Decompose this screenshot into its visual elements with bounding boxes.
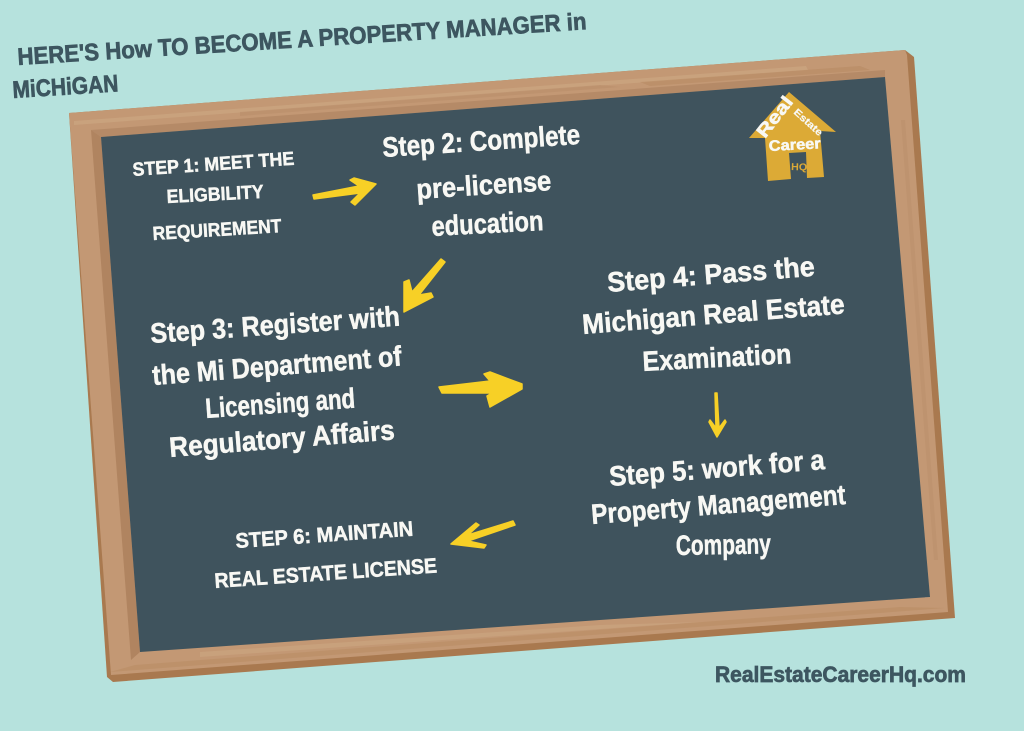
step 4 text bbox=[581, 251, 846, 377]
step 6 text: REAL ESTATE LICENSE bbox=[214, 554, 438, 593]
logo: Real Estate Career HQ house: HQ bbox=[791, 162, 808, 174]
step 1 text: REQUIREMENT bbox=[152, 216, 282, 245]
step 3 text: Regulatory Affairs bbox=[168, 414, 396, 463]
step 2 text bbox=[381, 119, 581, 242]
step 1 text bbox=[132, 149, 295, 245]
step 6 text bbox=[214, 518, 438, 593]
step 3 text: Step 3: Register with bbox=[149, 301, 401, 349]
arrow: step 4 to step 5 bbox=[709, 393, 726, 437]
step 4 text: Examination bbox=[642, 338, 792, 377]
arrow: step 5 to step 6 bbox=[451, 521, 515, 548]
arrow: step 1 to step 2 bbox=[313, 178, 376, 205]
step 4 text: Step 4: Pass the bbox=[606, 251, 816, 298]
step 3 text bbox=[149, 301, 403, 463]
logo: Real Estate Career HQ house bbox=[749, 92, 836, 181]
step 5 text bbox=[590, 444, 847, 561]
step 5 text: Step 5: work for a bbox=[608, 444, 826, 492]
step 6 text: STEP 6: MAINTAIN bbox=[235, 518, 414, 553]
chalkboard with wooden frame bbox=[69, 50, 955, 682]
logo: Real Estate Career HQ house: Career bbox=[768, 135, 821, 155]
arrow: step 3 to step 4 bbox=[439, 372, 522, 407]
step 2 text: Step 2: Complete bbox=[381, 119, 581, 163]
step 2 text: education bbox=[431, 205, 544, 242]
title: MiCHiGAN bbox=[12, 70, 119, 104]
logo: Real Estate Career HQ house: Real bbox=[752, 92, 797, 141]
step 5 text: Company bbox=[676, 528, 771, 561]
title: HERE'S How TO BECOME A PROPERTY MANAGER in bbox=[17, 8, 587, 71]
step 5 text: Property Management bbox=[590, 479, 847, 530]
step 1 text: ELIGBILITY bbox=[166, 182, 264, 208]
logo: Real Estate Career HQ house: Estate bbox=[791, 107, 825, 139]
arrow: step 2 to step 3 bbox=[404, 259, 445, 312]
step 3 text: Licensing and bbox=[204, 383, 356, 424]
website footer: RealEstateCareerHq.com bbox=[715, 662, 966, 687]
step 4 text: Michigan Real Estate bbox=[581, 288, 846, 340]
step 3 text: the Mi Department of bbox=[151, 340, 403, 391]
step 1 text: STEP 1: MEET THE bbox=[132, 149, 295, 181]
step 2 text: pre-license bbox=[415, 165, 552, 205]
title bbox=[12, 8, 587, 104]
